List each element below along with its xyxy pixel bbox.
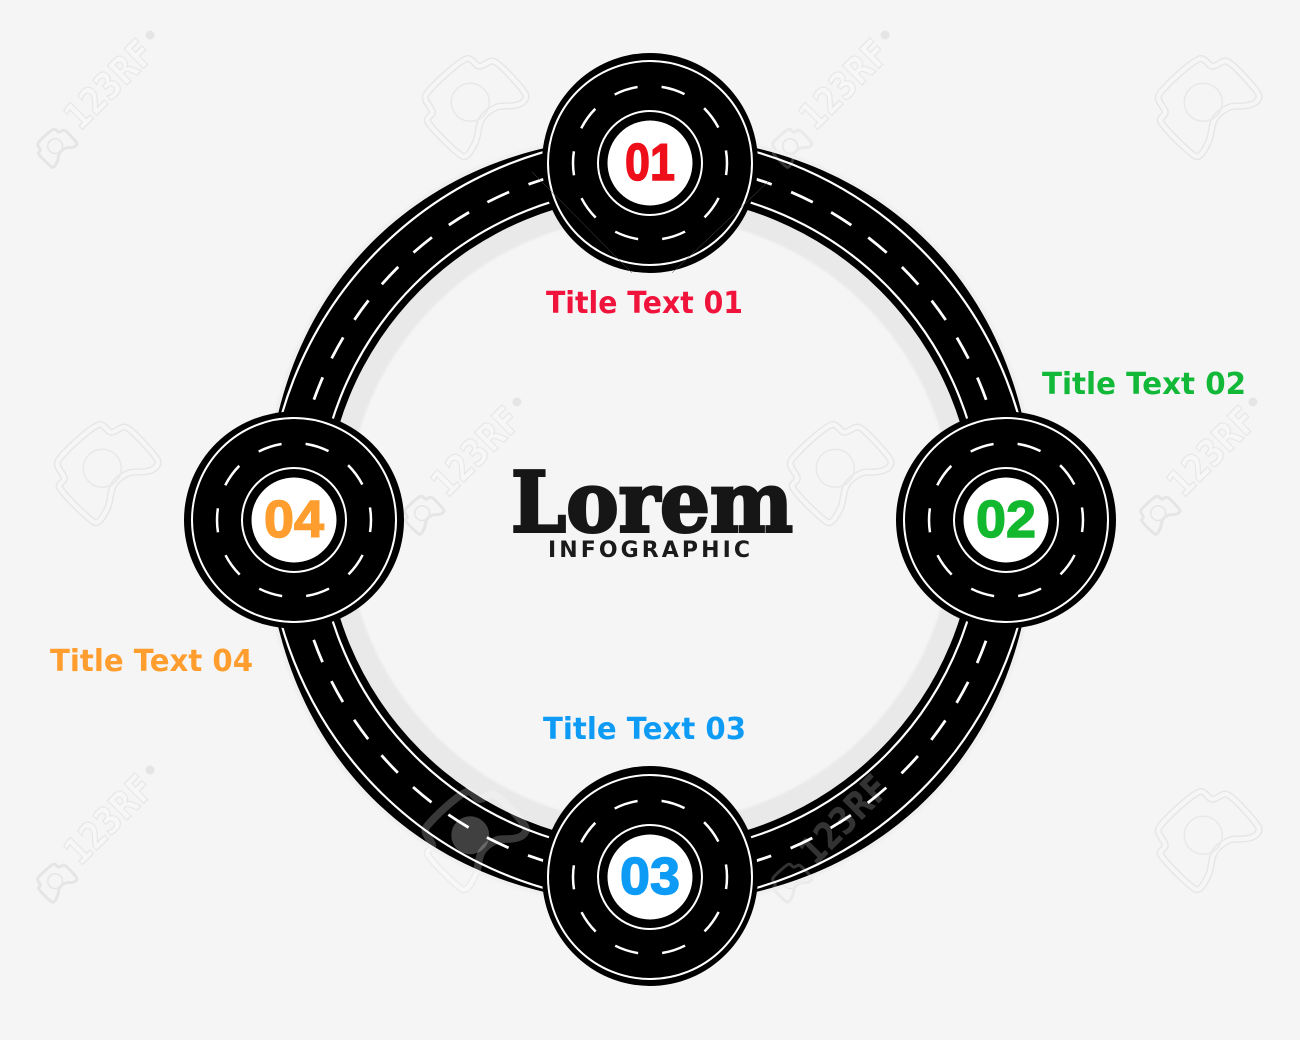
watermark logo 3: 123RF xyxy=(422,398,530,505)
watermark egg icon bottom centre xyxy=(425,792,526,890)
watermark logo 6 xyxy=(773,766,898,902)
number 03: 03 xyxy=(620,848,680,906)
ring road xyxy=(266,136,1034,904)
watermark icon overlay on road top right xyxy=(773,129,812,167)
title text 03: Title Text 03 xyxy=(543,712,746,747)
number 01: 01 xyxy=(625,134,675,192)
watermark logo 3 xyxy=(405,398,530,534)
watermark text overlay on road bottom right: 123RF xyxy=(790,766,898,873)
title text 02: Title Text 02 xyxy=(1042,367,1246,402)
watermark logo 5 xyxy=(38,766,163,902)
watermark egg icon bottom right xyxy=(1158,792,1259,890)
watermark logo 5: 123RF xyxy=(55,766,163,873)
hub 01 xyxy=(532,53,770,273)
title text 04: Title Text 04 xyxy=(50,644,253,679)
number 04: 04 xyxy=(264,491,324,549)
road shadow xyxy=(264,134,1036,906)
centre logo xyxy=(511,454,793,563)
hub 02 xyxy=(896,412,1116,628)
watermark overlay on road bottom left xyxy=(425,792,526,890)
watermark egg icon middle left xyxy=(57,425,158,523)
watermark logo 1: 123RF xyxy=(55,31,163,138)
watermark logo 1 xyxy=(38,30,163,167)
watermark egg icon top centre xyxy=(425,59,526,157)
hub 04 xyxy=(184,412,404,628)
watermark logo 2 xyxy=(773,30,898,167)
watermark logo 2: 123RF xyxy=(790,31,898,138)
watermark icon overlay on road bottom right xyxy=(773,864,812,902)
watermark logo 4 xyxy=(1141,398,1266,534)
logo word Lorem: Lorem xyxy=(511,454,793,552)
watermark logo 4: 123RF xyxy=(1158,398,1266,505)
number 02: 02 xyxy=(976,491,1036,549)
logo subtitle: INFOGRAPHIC xyxy=(548,538,750,563)
watermark egg icon top right xyxy=(1158,59,1259,157)
watermark egg icon middle right xyxy=(790,425,891,523)
hub 03 xyxy=(542,766,758,986)
title text 01: Title Text 01 xyxy=(546,286,743,321)
watermark layer xyxy=(38,30,1266,902)
watermark logo 6: 123RF xyxy=(790,766,898,873)
